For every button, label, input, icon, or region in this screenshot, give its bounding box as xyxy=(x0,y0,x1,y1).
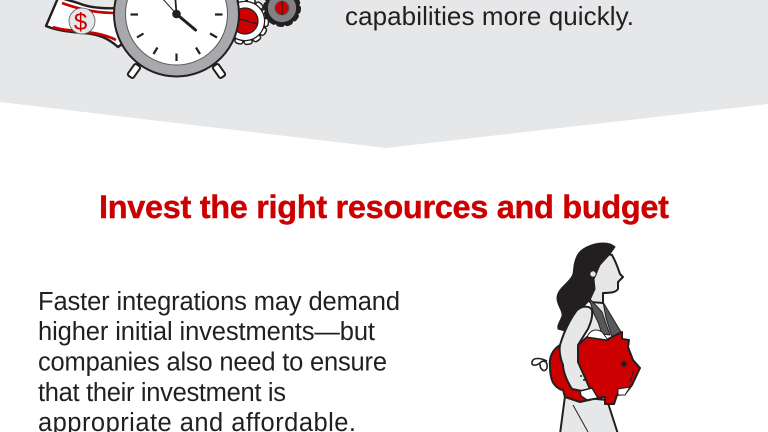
pig eye xyxy=(621,361,627,367)
text: capabilities: capabilities more quickly. xyxy=(345,1,634,31)
vest lapels xyxy=(589,298,610,335)
pig snout xyxy=(630,369,634,382)
clock left foot xyxy=(127,63,141,79)
legs xyxy=(560,396,618,432)
heading: Invest the right resources and budget xyxy=(99,189,669,225)
icon: woman carrying piggy bank xyxy=(532,243,640,432)
arm xyxy=(560,307,592,391)
body text block: Faster integrations may demand xyxy=(38,288,400,316)
pig tail xyxy=(532,358,547,371)
body text block: that their investment is xyxy=(38,379,286,407)
icon: banknote: $ xyxy=(74,9,87,36)
icon: alarm clock xyxy=(114,0,239,79)
grey top panel with chevron bottom xyxy=(0,0,768,148)
icon: small grey gear xyxy=(266,0,298,24)
arm buttons xyxy=(580,375,582,377)
clock ring xyxy=(114,0,239,76)
icon: banknote xyxy=(46,0,122,47)
front hand xyxy=(618,387,630,395)
icon: large red gear xyxy=(224,0,266,42)
face and neck xyxy=(590,252,623,303)
clock face xyxy=(126,0,228,65)
body text block xyxy=(38,288,400,432)
shirt xyxy=(590,304,612,336)
hair xyxy=(557,243,615,331)
body text block: higher initial investments—but xyxy=(38,318,375,346)
piggy bank xyxy=(550,332,640,404)
body text block: companies also need to ensure xyxy=(38,348,387,376)
clock right foot xyxy=(212,63,226,79)
hand xyxy=(580,388,598,400)
clock tick marks xyxy=(130,14,222,61)
ear xyxy=(590,271,596,277)
white belly patch xyxy=(587,330,608,340)
clock hands xyxy=(161,0,196,30)
